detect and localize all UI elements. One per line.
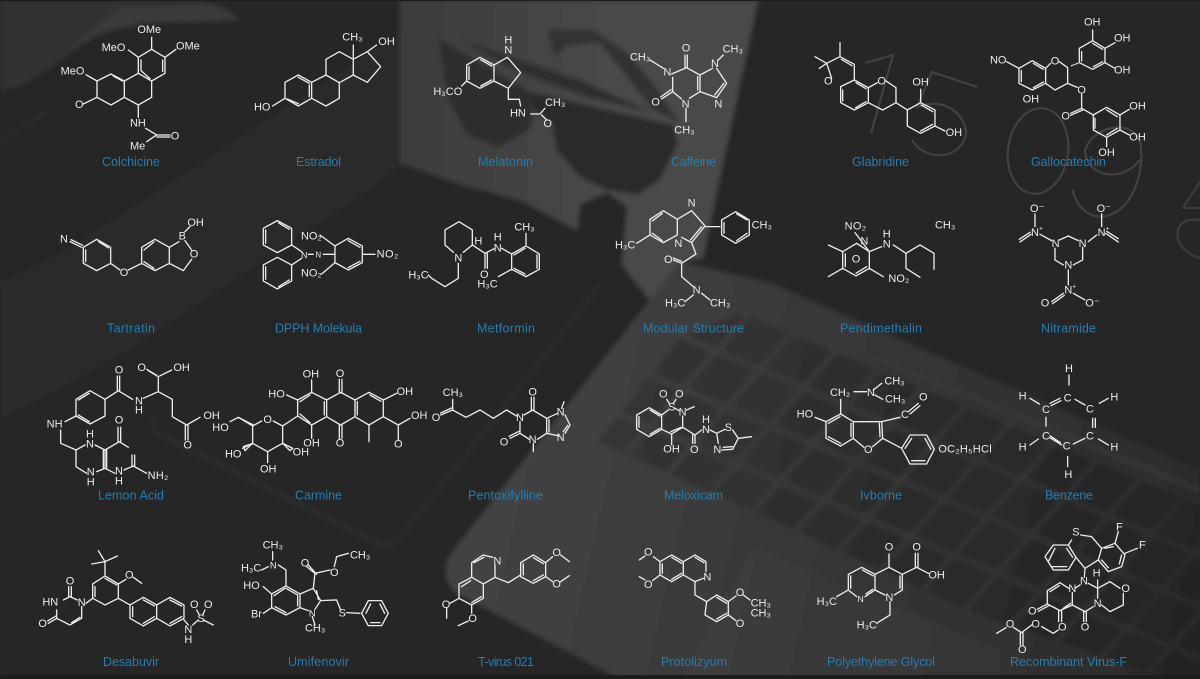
structure: Lemon Acid: OH: [173, 362, 190, 374]
structure: Umifenovir: O: [301, 557, 310, 569]
structure: Gallocatechin: OH: [1023, 94, 1039, 106]
structure: Nitramide: N: [1064, 260, 1072, 272]
structure: Carmine: HO: [212, 422, 229, 434]
structure: DPPH Molekula: NO₂: [377, 249, 398, 261]
label: Estradol: Estradol: [296, 155, 341, 169]
structure: Recombinant Virus-F: F: [1139, 540, 1146, 552]
structure: Lemon Acid: N: [115, 466, 123, 478]
structure: Tartratin: [60, 217, 204, 279]
structure: Lemon Acid: NH₂: [148, 470, 168, 482]
structure: Lemon Acid: O: [115, 415, 124, 427]
structure: Modular Structure: CH₃: [710, 298, 730, 310]
structure: Melatonin: HN: [510, 108, 526, 120]
structure: Lemon Acid: O: [137, 362, 146, 374]
molecule card: Estradol: [254, 31, 395, 169]
label: Meloxicam: Meloxicam: [664, 488, 723, 502]
structure: Ivborne: CH₃: [884, 375, 905, 387]
structure: T-virus 021: O: [442, 599, 451, 611]
structure: Metformin: H: [474, 235, 482, 247]
structure: Nitramide: N: [1064, 285, 1072, 297]
structure: Pendimethalin: N: [883, 239, 891, 251]
structure: Carmine: OH: [303, 368, 319, 380]
structure: Desabuvir: O: [38, 618, 47, 630]
structure: Glabridine: [815, 43, 962, 139]
structure: Benzene: H: [1064, 469, 1072, 481]
structure: Recombinant Virus-F: N: [1068, 583, 1076, 595]
structure: Pentoxifylline: CH₃: [443, 387, 463, 399]
structure: Pendimethalin: NO₂: [845, 220, 866, 232]
structure: Meloxicam: N: [702, 424, 710, 436]
molecule card: Lemon Acid: [47, 362, 220, 502]
molecule card: Protolizyum: [639, 546, 771, 669]
molecule card: DPPH Molekula: [263, 221, 398, 336]
molecule card: Tartratin: [60, 217, 204, 336]
structure: Meloxicam: O: [675, 389, 684, 401]
structure: Lemon Acid: H: [86, 429, 94, 441]
molecule card: Polyethylene Glycol: [817, 541, 945, 669]
structure: Melatonin: CH₃: [545, 97, 565, 109]
structure: Carmine: O: [336, 368, 345, 380]
structure: DPPH Molekula: N: [315, 251, 321, 260]
structure: T-virus 021: O: [552, 579, 561, 591]
structure: Carmine: O: [394, 439, 403, 451]
structure: Pentoxifylline: N: [557, 432, 565, 444]
structure: Nitramide: O: [1041, 297, 1050, 309]
structure: Carmine: OH: [397, 386, 413, 398]
structure: Umifenovir: HO: [243, 580, 260, 592]
structure: Colchicine: O: [171, 130, 180, 142]
structure: Pentoxifylline: N: [557, 406, 565, 418]
structure: Protolizyum: O: [644, 579, 653, 591]
structure: Ivborne: CH₃: [885, 394, 905, 406]
structure: Benzene: H: [1065, 363, 1073, 375]
molecule card: Nitramide: [1019, 203, 1118, 336]
structure: Nitramide: O⁻: [1097, 203, 1111, 215]
structure: Gallocatechin: OH: [1129, 100, 1146, 112]
structure: Carmine: O: [336, 437, 345, 449]
label: Pendimethalin: Pendimethalin: [840, 322, 922, 336]
structure: Gallocatechin: OH: [1114, 64, 1131, 76]
structure: Polyethylene Glycol: H₃C: [857, 619, 877, 631]
molecule card: Gallocatechin: [990, 17, 1146, 169]
molecule card: Caffeine: [630, 42, 743, 169]
structure: DPPH Molekula: N: [301, 250, 307, 260]
structure: Benzene: H: [1110, 391, 1118, 403]
structure: Ivborne: OC₂H₅HCl: [938, 444, 992, 456]
structure: Protolizyum: O: [644, 546, 653, 558]
structure: Carmine: HO: [225, 449, 242, 461]
structure: Colchicine: [61, 24, 200, 153]
structure: Gallocatechin: OH: [1114, 33, 1131, 45]
structure: Gallocatechin: [990, 17, 1146, 159]
structure: Desabuvir: H: [184, 634, 192, 646]
structure: Lemon Acid: OH: [203, 410, 220, 422]
structure: Recombinant Virus-F: N: [1080, 575, 1088, 587]
structure: Recombinant Virus-F: H: [1093, 567, 1101, 579]
structure: Meloxicam: O: [659, 389, 668, 401]
molecule card: Pendimethalin: [828, 220, 955, 336]
structure: Melatonin: [433, 34, 565, 130]
label: T-virus 021: T-virus 021: [478, 655, 534, 669]
structure: T-virus 021: [442, 547, 569, 626]
structure: Modular Structure: H₃C: [665, 298, 685, 310]
structure: Colchicine: OMe: [137, 24, 161, 36]
label: Umifenovir: Umifenovir: [288, 655, 349, 669]
structure: Colchicine: MeO: [102, 42, 126, 54]
structure: Estradol: OH: [378, 36, 395, 48]
structure: Gallocatechin: NO: [990, 54, 1007, 66]
structure: Polyethylene Glycol: N: [858, 594, 864, 604]
structure: Recombinant Virus-F: [997, 521, 1146, 656]
structure: Caffeine: N: [682, 99, 690, 111]
structure: Modular Structure: H₃C: [615, 239, 635, 251]
structure: Modular Structure: N: [693, 285, 701, 297]
structure: Recombinant Virus-F: N: [1094, 598, 1102, 610]
structure: Carmine: OH: [303, 438, 320, 450]
structure: Recombinant Virus-F: F: [1116, 521, 1123, 533]
structure: Caffeine: CH₃: [630, 52, 650, 64]
structure: Gallocatechin: OH: [1084, 17, 1101, 29]
structure: Estradol: [254, 31, 395, 113]
structure: DPPH Molekula: NO₂: [301, 230, 322, 242]
structure: Recombinant Virus-F: O: [1058, 621, 1067, 633]
structure: Pentoxifylline: O: [500, 436, 509, 448]
structure: Benzene: H: [1019, 391, 1027, 403]
structure: Colchicine: NH: [130, 118, 146, 130]
structure: Colchicine: MeO: [61, 66, 85, 78]
molecule card: Benzene: [1019, 363, 1118, 502]
molecule card: Meloxicam: [637, 389, 752, 502]
structure: Meloxicam: H: [702, 414, 710, 426]
structure: Protolizyum: O: [736, 587, 745, 599]
structure: Colchicine: Me: [130, 141, 145, 153]
structure: Melatonin: H₃CO: [433, 86, 463, 98]
structure: Tartratin: OH: [187, 217, 204, 229]
structure: Pentoxifylline: N: [529, 434, 537, 446]
structure: Pendimethalin: [828, 220, 955, 285]
structure: Lemon Acid: NH: [47, 419, 63, 431]
structure: Carmine: OH: [293, 447, 309, 459]
structure: Nitramide: N: [1079, 238, 1087, 250]
structure: Lemon Acid: H: [87, 476, 95, 488]
structure: Melatonin: N: [504, 44, 512, 56]
structure: Tartratin: O: [120, 267, 129, 279]
structure: Caffeine: N: [663, 66, 671, 78]
structure: Nitramide: O⁻: [1030, 203, 1045, 215]
structure: Ivborne: O: [919, 391, 928, 403]
structure: Pentoxifylline: O: [528, 386, 537, 398]
label: Metformin: Metformin: [477, 322, 535, 336]
structure: Polyethylene Glycol: [817, 541, 945, 631]
structure: Benzene: H: [1019, 441, 1027, 453]
structure: Nitramide: N: [1052, 238, 1060, 250]
structure: Metformin: O: [480, 269, 489, 281]
structure: Benzene: H: [1110, 441, 1118, 453]
structure: Caffeine: O: [651, 96, 660, 108]
molecule card: Pentoxifylline: [432, 386, 570, 502]
structure: Metformin: N: [454, 252, 462, 264]
structure: Umifenovir: CH₃: [350, 549, 370, 561]
structure: Desabuvir: [38, 551, 213, 646]
structure: Recombinant Virus-F: S: [1072, 526, 1080, 538]
structure: Modular Structure: N: [674, 238, 682, 250]
structure: Pendimethalin: H: [883, 229, 891, 241]
label: Colchicine: Colchicine: [102, 155, 160, 169]
molecule card: Modular Structure: [615, 197, 772, 336]
structure: Carmine: O: [263, 414, 272, 426]
structure: Estradol: HO: [254, 101, 271, 113]
structure: Polyethylene Glycol: O: [885, 541, 894, 553]
structure: Umifenovir: CH₃: [305, 623, 325, 635]
structure: Desabuvir: O: [190, 599, 199, 611]
structure: Modular Structure: CH₃: [752, 219, 772, 231]
structure: Desabuvir: N: [184, 624, 192, 636]
structure: Desabuvir: O: [66, 575, 75, 587]
structure: Umifenovir: [241, 539, 388, 635]
label: Tartratin: Tartratin: [107, 322, 155, 336]
label: Caffeine: Caffeine: [671, 155, 716, 169]
label: Desabuvir: Desabuvir: [103, 655, 159, 669]
structure: Gallocatechin: O: [1077, 85, 1086, 97]
structure: DPPH Molekula: NO₂: [301, 268, 322, 280]
structure: Recombinant Virus-F: O: [1031, 619, 1040, 631]
structure: Pentoxifylline: [432, 386, 570, 452]
structure: Ivborne: CH₂: [830, 387, 850, 399]
structure: Lemon Acid: H: [135, 405, 143, 417]
structure: Polyethylene Glycol: N: [885, 592, 893, 604]
structure: Gallocatechin: OH: [1098, 147, 1115, 159]
structure: Polyethylene Glycol: OH: [928, 569, 945, 581]
structure: Glabridine: OH: [912, 77, 929, 89]
structure: Ivborne: O: [864, 444, 873, 456]
structure: Gallocatechin: OH: [1129, 132, 1146, 144]
structure: DPPH Molekula: [263, 221, 398, 289]
structure: Meloxicam: N: [679, 406, 687, 418]
structure: Metformin: N: [494, 242, 502, 254]
structure: Ivborne: HO: [797, 409, 814, 421]
structure: Pendimethalin: N: [860, 235, 868, 247]
structure: Melatonin: H: [504, 34, 512, 46]
structure: Glabridine: O: [877, 76, 886, 88]
structure: T-virus 021: O: [468, 613, 477, 625]
label: Recombinant Virus-F: Recombinant Virus-F: [1010, 655, 1127, 669]
structure: Nitramide: N: [1031, 227, 1039, 239]
structure: Protolizyum: CH₃: [751, 608, 771, 620]
structure: Colchicine: O: [75, 99, 84, 111]
structure: Meloxicam: [637, 389, 752, 456]
structure: Tartratin: O: [190, 249, 199, 261]
structure: Nitramide: +: [1039, 226, 1043, 233]
structure: Estradol: CH₃: [342, 31, 363, 43]
structure: Caffeine: N: [714, 99, 722, 111]
structure: Umifenovir: H₃C: [241, 563, 261, 575]
label: Glabridine: Glabridine: [852, 155, 909, 169]
structure: Metformin: H₃C: [408, 269, 429, 281]
structure: Benzene: C: [1063, 440, 1071, 452]
structure: Gallocatechin: O: [1061, 110, 1070, 122]
structure: Umifenovir: Br: [251, 608, 262, 620]
molecule card: Carmine: [212, 368, 428, 502]
label: Pentoxifylline: Pentoxifylline: [468, 488, 543, 502]
structure: Nitramide: +: [1072, 284, 1076, 291]
structure: Lemon Acid: H: [115, 475, 123, 487]
structure: Tartratin: B: [179, 231, 186, 243]
structure: Polyethylene Glycol: H₃C: [817, 596, 837, 608]
label: Gallocatechin: Gallocatechin: [1031, 155, 1106, 169]
structure: T-virus 021: N: [493, 555, 501, 567]
structure: Metformin: H₃C: [477, 279, 498, 291]
structure: Protolizyum: [639, 546, 771, 630]
molecule card: Colchicine: [61, 24, 200, 169]
molecule card: T-virus 021: [442, 547, 569, 669]
structure: Carmine: OH: [411, 410, 428, 422]
structure: Ivborne: [797, 375, 992, 464]
structure: Pendimethalin: O: [852, 254, 861, 266]
structure: Pendimethalin: NO₂: [888, 273, 909, 285]
molecule card: Umifenovir: [241, 539, 388, 669]
structure: Benzene: C: [1086, 431, 1094, 443]
structure: Carmine: [212, 368, 428, 476]
structure: Tartratin: N: [60, 234, 68, 246]
structure: Recombinant Virus-F: O: [1018, 644, 1027, 656]
structure: Benzene: C: [1064, 392, 1072, 404]
structure: Modular Structure: N: [688, 197, 696, 209]
molecule card: Metformin: [408, 222, 539, 336]
structure: Protolizyum: O: [736, 618, 745, 630]
structure: Umifenovir: CH₃: [263, 539, 283, 551]
structure: Ivborne: N: [867, 387, 875, 399]
label: Protolizyum: Protolizyum: [661, 655, 727, 669]
structure: Nitramide: +: [1106, 226, 1110, 233]
structure: Nitramide: N: [1098, 227, 1106, 239]
structure: Meloxicam: N: [713, 444, 721, 456]
structure: Umifenovir: N: [270, 561, 277, 571]
label: Carmine: Carmine: [295, 488, 342, 502]
background: large handwritten digits: [865, 55, 1200, 258]
structure: Polyethylene Glycol: O: [912, 541, 921, 553]
structure: Gallocatechin: O: [1051, 55, 1060, 67]
structure: Lemon Acid: [47, 362, 220, 488]
molecule card: Recombinant Virus-F: [997, 521, 1146, 669]
structure: Modular Structure: O: [664, 254, 673, 266]
label: Lemon Acid: Lemon Acid: [98, 488, 164, 502]
structure: Recombinant Virus-F: O: [1121, 583, 1130, 595]
structure: Lemon Acid: N: [87, 466, 95, 478]
label: Polyethylene Glycol: Polyethylene Glycol: [827, 655, 935, 669]
structure: Protolizyum: CH₃: [751, 598, 771, 610]
structure: Metformin: [408, 222, 539, 291]
label: Ivborne: Ivborne: [860, 488, 902, 502]
label: Benzene: Benzene: [1045, 488, 1093, 502]
structure: Caffeine: CH₃: [674, 124, 695, 136]
structure: Metformin: H: [494, 231, 502, 243]
structure: Lemon Acid: N: [86, 439, 94, 451]
structure: Caffeine: CH₃: [723, 44, 743, 56]
molecule card: Ivborne: [797, 375, 992, 502]
structure: Colchicine: OMe: [176, 40, 200, 52]
structure: Desabuvir: HN: [42, 597, 58, 609]
structure: Desabuvir: O: [125, 570, 134, 582]
structure: Nitramide: O⁻: [1085, 297, 1100, 309]
structure: Recombinant Virus-F: O: [1028, 606, 1037, 618]
structure: Caffeine: O: [682, 42, 691, 54]
structure: Meloxicam: S: [668, 402, 675, 414]
structure: Caffeine: N: [711, 58, 719, 70]
label: DPPH Molekula: DPPH Molekula: [275, 322, 362, 336]
structure: Desabuvir: S: [197, 613, 205, 625]
structure: T-virus 021: O: [552, 547, 561, 559]
structure: Umifenovir: O: [330, 567, 339, 579]
structure: Umifenovir: S: [339, 607, 346, 619]
structure: Nitramide: [1019, 203, 1118, 309]
structure: Meloxicam: OH: [663, 444, 680, 456]
structure: Desabuvir: N: [78, 597, 86, 609]
molecule card: Melatonin: [433, 34, 565, 169]
structure: Lemon Acid: N: [135, 395, 143, 407]
structure: Melatonin: O: [543, 118, 552, 130]
structure: Carmine: OH: [260, 464, 277, 476]
label: Nitramide: Nitramide: [1041, 322, 1096, 336]
label: Melatonin: Melatonin: [478, 155, 533, 169]
structure: Lemon Acid: O: [115, 365, 124, 377]
structure: Lemon Acid: O: [183, 440, 192, 452]
structure: Protolizyum: N: [703, 571, 711, 583]
structure: Meloxicam: S: [725, 422, 732, 434]
structure: Pentoxifylline: O: [432, 412, 441, 424]
structure: Pentoxifylline: N: [516, 412, 524, 424]
structure: Benzene: C: [1042, 404, 1050, 416]
structure: Glabridine: OH: [946, 127, 962, 139]
structure: Caffeine: [630, 42, 743, 136]
molecule card: Desabuvir: [38, 551, 213, 669]
structure: Metformin: CH₃: [514, 222, 535, 234]
structure: Recombinant Virus-F: O: [1081, 621, 1090, 633]
structure: Desabuvir: O: [204, 599, 213, 611]
structure: Meloxicam: O: [690, 444, 699, 456]
structure: Benzene: [1019, 363, 1118, 481]
structure: Umifenovir: N: [309, 608, 316, 618]
molecule card: Glabridine: [815, 43, 962, 169]
structure: Recombinant Virus-F: O: [1006, 619, 1015, 631]
label: Modular Structure: Modular Structure: [643, 322, 744, 336]
structure: Benzene: C: [1042, 430, 1050, 442]
structure: Pendimethalin: CH₃: [935, 220, 955, 232]
structure: Glabridine: O: [824, 76, 833, 88]
structure: Modular Structure: [615, 197, 772, 310]
structure: Ivborne: C: [901, 409, 909, 421]
structure: Carmine: HO: [268, 388, 285, 400]
structure: Benzene: C: [1086, 404, 1094, 416]
